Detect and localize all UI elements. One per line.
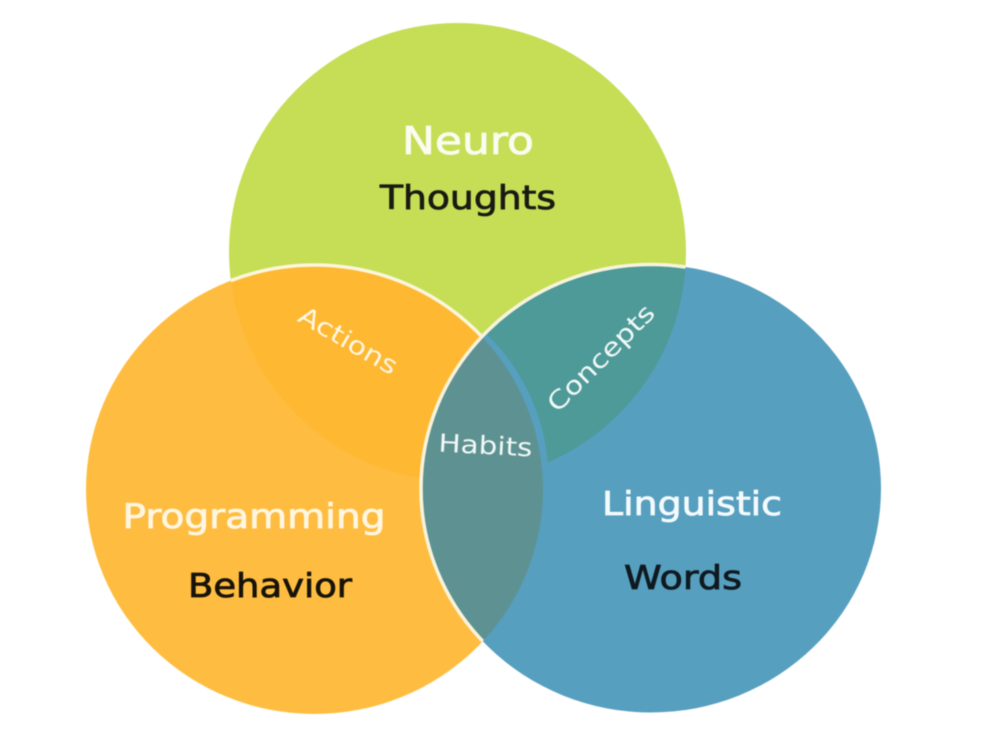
label: Programming: Programming bbox=[122, 497, 386, 537]
label: Behavior: Behavior bbox=[188, 566, 352, 605]
venn diagram bbox=[85, 22, 882, 715]
label: Habits: Habits bbox=[438, 429, 533, 462]
label: Linguistic: Linguistic bbox=[602, 484, 782, 523]
label: Concepts: Concepts bbox=[541, 298, 661, 418]
outline: Linguistic inner arc bbox=[418, 262, 686, 643]
label: Neuro: Neuro bbox=[402, 119, 534, 163]
label: Actions: Actions bbox=[293, 301, 403, 381]
circle: Linguistic bbox=[421, 264, 881, 712]
circle: Neuro bbox=[229, 23, 686, 481]
overlap: Actions bbox=[232, 267, 479, 478]
label: Thoughts: Thoughts bbox=[379, 178, 556, 217]
circle: Programming bbox=[86, 265, 543, 714]
overlap: Concepts bbox=[486, 266, 686, 462]
overlap: Habits bbox=[422, 338, 544, 640]
outline: Programming top arc bbox=[230, 262, 482, 338]
label: Words: Words bbox=[624, 558, 742, 597]
